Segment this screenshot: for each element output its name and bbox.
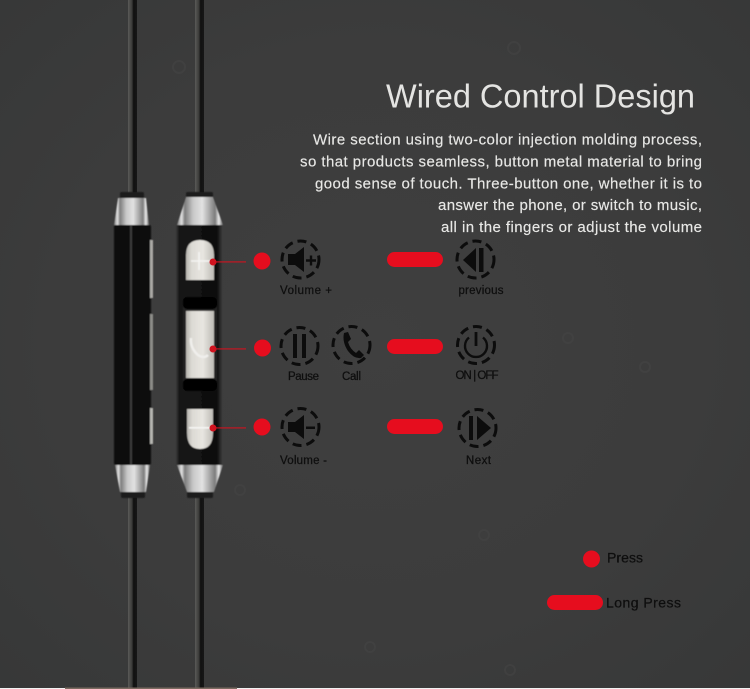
body text: all in the fingers or adjust the volume (441, 219, 702, 236)
labels: Volume + (280, 285, 332, 297)
labels: previous (458, 285, 504, 297)
press dot: row 2 (254, 340, 271, 356)
connector: volume plus (210, 258, 246, 266)
legend: press dot (583, 550, 600, 568)
legend labels (606, 550, 681, 610)
press dot: row 1 (254, 252, 270, 270)
remote: front view (176, 192, 223, 498)
icon: pause (281, 328, 318, 364)
icon: call (333, 326, 370, 364)
connector: call (210, 346, 246, 352)
long press bar: row 2 (387, 339, 443, 354)
wire: side view (128, 0, 137, 689)
labels: ON | OFF (456, 370, 498, 382)
connector: volume minus (210, 424, 246, 432)
wires (128, 0, 204, 689)
legend labels: Long Press (606, 594, 681, 610)
body text: so that products seamless, button metal material to bring (300, 154, 702, 170)
bottom button: volume minus (187, 409, 213, 449)
long press bar: row 1 (387, 252, 443, 267)
press dot: row 3 (254, 418, 270, 436)
labels: Pause (288, 371, 319, 383)
title: Wired Control Design (386, 78, 695, 114)
labels: Call (342, 371, 361, 383)
body text (300, 132, 702, 236)
legend: long press bar (547, 595, 603, 610)
body text: Wire section using two-color injection molding process, (313, 132, 702, 148)
labels: Next (466, 455, 492, 467)
icon: volume down (282, 408, 319, 446)
labels (280, 285, 504, 467)
long press bar: row 3 (387, 419, 443, 434)
middle button: call (186, 311, 214, 378)
background circuit pattern (173, 42, 650, 675)
bottom edge line (0, 688, 750, 689)
middle button recess (183, 297, 217, 391)
legend labels: Press (607, 550, 643, 566)
icon: volume up (282, 241, 319, 278)
icon: previous (457, 241, 494, 278)
body text: good sense of touch. Three-button one, whether it is to (315, 176, 702, 192)
icon: next (459, 410, 496, 446)
labels: Volume - (280, 455, 327, 467)
icon: power (458, 326, 494, 364)
wire: front view (195, 0, 204, 689)
remote: side view (114, 192, 153, 498)
body text: answer the phone, or switch to music, (438, 197, 702, 214)
top button: volume plus (186, 240, 214, 280)
